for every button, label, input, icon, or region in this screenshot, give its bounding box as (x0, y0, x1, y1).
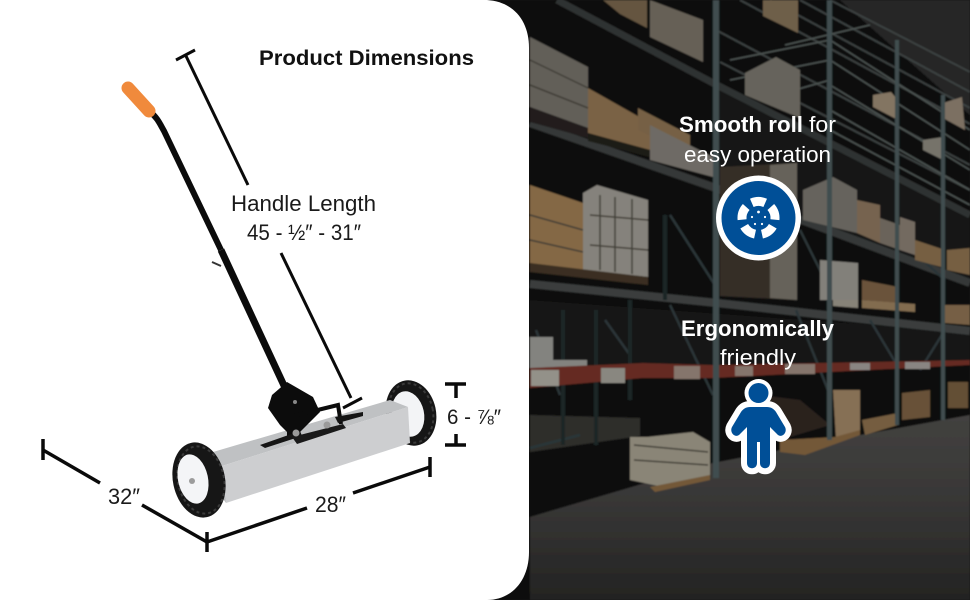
product: magnetic sweeper (128, 88, 442, 523)
icon: person (731, 379, 786, 468)
background: warehouse photo (500, 0, 970, 600)
text: smooth roll: Smooth roll (679, 112, 803, 137)
text: ergonomically friendly: Ergonomically (681, 316, 835, 341)
dimension line: height (445, 384, 466, 445)
text: smooth roll: for (809, 112, 836, 137)
shelves: uprights (713, 0, 945, 478)
left wheel (166, 437, 232, 523)
label: handle length: Handle Length (231, 191, 376, 216)
sweeper body (213, 400, 410, 503)
text: smooth roll: easy operation (684, 142, 831, 167)
label: width: 28″ (315, 492, 346, 517)
right wheel (380, 376, 442, 450)
dimension line: depth (43, 439, 207, 542)
text: ergonomically friendly (681, 316, 835, 370)
panel: white product area (0, 0, 529, 600)
handle (128, 88, 300, 420)
text: ergonomically friendly: friendly (720, 345, 796, 370)
label: height: 6 - ⅞″ (447, 406, 502, 429)
pallets: stacked boxes (530, 0, 970, 492)
title: Product Dimensions (259, 46, 474, 70)
label: handle length (231, 191, 376, 245)
shelves: racking lines (530, 0, 970, 448)
label: handle length: 45 - ½″ - 31″ (247, 220, 361, 245)
dimension line: handle length (176, 50, 362, 408)
bracket (260, 382, 363, 448)
dimension line: width (207, 457, 430, 552)
icon: wheel (716, 176, 801, 260)
text: smooth roll (679, 112, 836, 167)
label: depth: 32″ (108, 484, 140, 509)
